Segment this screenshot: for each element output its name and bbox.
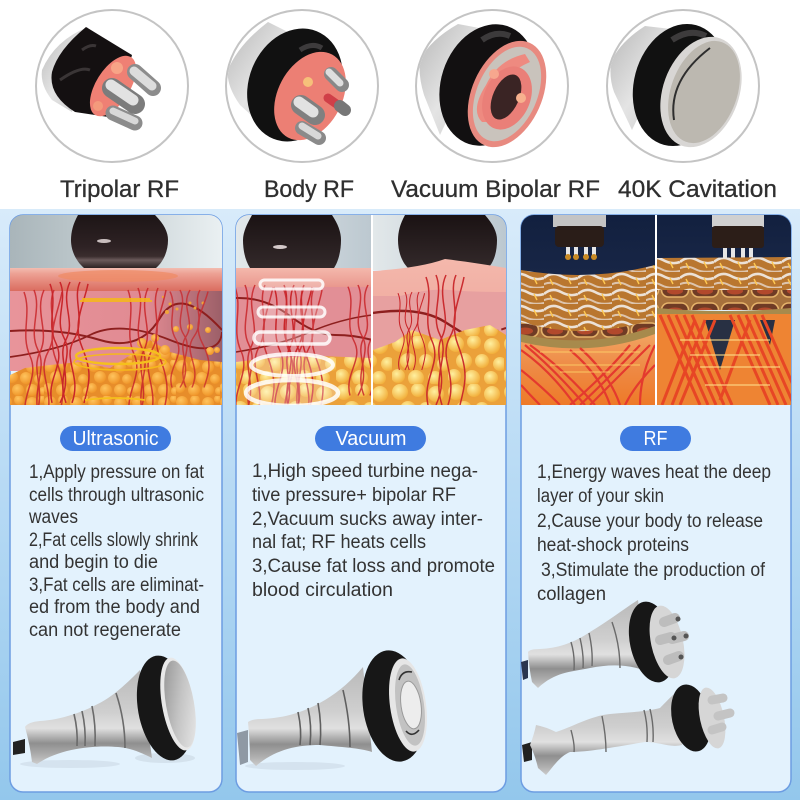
label pill: Vacuum: Vacuum [336, 428, 406, 450]
text block: vacuum points: nal fat; RF heats cells [252, 532, 426, 553]
illustration: ultrasonic skin cross-section [10, 215, 222, 420]
text block: ultrasonic points: 2,Fat cells slowly shrink [29, 530, 198, 551]
icon: vacuum bipolar RF [420, 24, 546, 148]
heading: Vacuum Bipolar RF: Vacuum Bipolar RF [391, 176, 600, 203]
circle outline [36, 10, 188, 162]
card [521, 215, 791, 792]
text block: ultrasonic points: and begin to die [29, 552, 158, 573]
white divider [655, 215, 657, 405]
illustration: RF after [657, 215, 800, 405]
icon: tripolar RF [42, 27, 153, 124]
heading: Tripolar RF: Tripolar RF [60, 176, 179, 203]
label pill: Ultrasonic: Ultrasonic [72, 428, 158, 450]
wand: tripolar/body RF upper handpiece [521, 597, 690, 688]
text block: ultrasonic points: 1,Apply pressure on fat [29, 462, 205, 483]
text block: ultrasonic points: ed from the body and [29, 597, 200, 618]
card [236, 215, 506, 792]
text block: vacuum points [252, 461, 495, 601]
panel: 40K cavitation head [607, 10, 759, 162]
panel: ultrasonic [10, 215, 222, 792]
text block: vacuum points: blood circulation [252, 580, 393, 601]
text block: ultrasonic points [28, 462, 205, 641]
card [10, 215, 222, 792]
white divider [371, 215, 373, 405]
text block: ultrasonic points: 3,Fat cells are eliminat- [29, 575, 204, 596]
text block: ultrasonic points: cells through ultrasonic [29, 485, 204, 506]
wand: ultrasonic handpiece [13, 651, 202, 768]
panel: tripolar RF head [36, 10, 188, 162]
text block: vacuum points: 1,High speed turbine nega- [252, 461, 478, 482]
wand: body RF lower handpiece [522, 681, 730, 775]
circle outline [226, 10, 378, 162]
text block: RF points: 3,Stimulate the production of [541, 560, 766, 581]
icon: body RF [228, 22, 351, 145]
text block: RF points: 2,Cause your body to release [537, 511, 763, 532]
panel: vacuum [235, 215, 506, 792]
illustration: vacuum before [236, 215, 371, 405]
text block: RF points: collagen [537, 584, 606, 605]
icon: 40K cavitation [610, 24, 742, 148]
illustration: vacuum after [373, 215, 506, 405]
illustration: RF before [521, 215, 656, 405]
wand: vacuum handpiece [237, 646, 432, 770]
panel: body RF head [226, 10, 378, 162]
panel: RF [521, 215, 800, 792]
label pill: RF [620, 426, 691, 451]
text block: RF points [537, 462, 771, 605]
circle outline [416, 10, 568, 162]
text block: ultrasonic points: waves [28, 507, 78, 528]
text block: RF points: 1,Energy waves heat the deep [537, 462, 771, 483]
text block: ultrasonic points: can not regenerate [29, 620, 181, 641]
label pill: RF: RF [644, 428, 668, 450]
text block: RF points: layer of your skin [537, 486, 664, 507]
text block: vacuum points: 2,Vacuum sucks away inter- [252, 509, 483, 530]
label pill: Vacuum [315, 426, 426, 451]
text block: vacuum points: 3,Cause fat loss and promote [252, 556, 495, 577]
circle outline [607, 10, 759, 162]
heading: 40K Cavitation: 40K Cavitation [618, 176, 777, 203]
text block: vacuum points: tive pressure+ bipolar RF [252, 485, 456, 506]
panel: vacuum bipolar RF head [416, 10, 568, 162]
heading: Body RF: Body RF [264, 176, 354, 203]
text block: RF points: heat-shock proteins [537, 535, 689, 556]
blue lower background [0, 209, 800, 800]
